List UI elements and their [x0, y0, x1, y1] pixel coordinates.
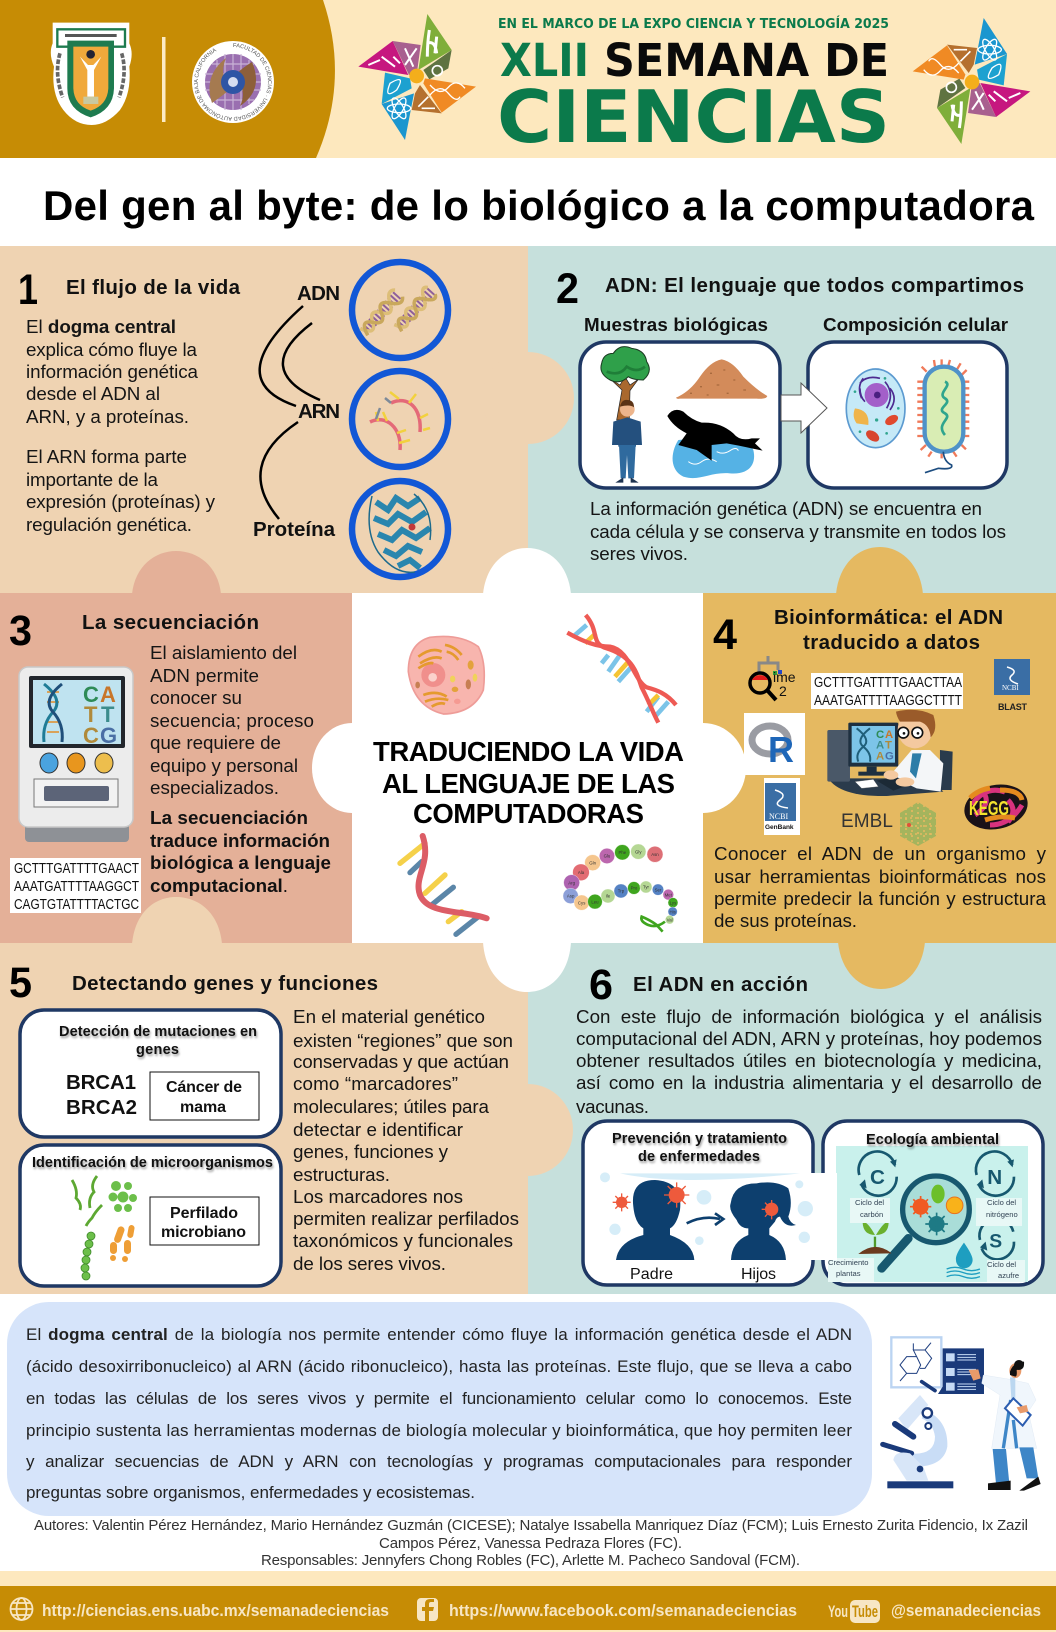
soil — [676, 359, 767, 399]
box: prevencion y tratamiento — [583, 1121, 837, 1285]
header eyebrow: EN EL MARCO DE LA EXPO CIENCIA Y TECNOLOGÍA 2025 — [498, 15, 889, 32]
box: ecologia ambiental: S — [989, 1231, 1002, 1252]
panel: resumen dogma central: preguntas sobre organismos, enfermedades y ecosistemas. — [26, 1483, 475, 1502]
icon: youtube — [828, 1600, 880, 1623]
label ADN: ADN — [297, 282, 340, 305]
icon: Qiime 2 — [750, 656, 796, 700]
icon: amino acid chain: Ser — [655, 887, 662, 892]
panel: resumen dogma central: (ácido desoxirribonucleico) al ARN (ácido ribonucleico), hasta las proteínas. Este flujo, que se lleva a cabo — [26, 1357, 852, 1376]
man — [620, 402, 635, 417]
text block 3: El aislamiento del — [150, 642, 297, 663]
arrow: samples to cells — [781, 383, 827, 433]
credits: Autores: Valentin Pérez Hernández, Mario Hernández Guzmán (CICESE); Natalye Issabella Manriquez Díaz (FCM); Luis Ernesto Zurita Fidencio, Ix Zazil — [34, 1517, 1028, 1534]
text block 3 — [150, 642, 331, 896]
number 3: 3 — [9, 607, 32, 655]
water — [673, 438, 754, 478]
box: prevencion y tratamiento: de enfermedades — [638, 1149, 760, 1165]
text block 2: La información genética (ADN) se encuentra en — [590, 498, 982, 519]
text block 1 — [26, 316, 216, 535]
panel: resumen dogma central: en todas las células de los seres vivos y permite el funcionamiento celular como lo conocemos. Este — [26, 1389, 852, 1408]
icon: sequencer machine: T — [101, 702, 115, 727]
icon: RNA bottom left — [400, 836, 487, 934]
logo divider — [162, 37, 166, 122]
icon: DNA top right — [567, 615, 676, 723]
panel: resumen dogma central: principio sustenta las herramientas modernas de biología molecular y bioinformática, que hoy permiten leer — [26, 1421, 852, 1440]
footer handle: @semanadeciencias — [891, 1601, 1041, 1620]
icon: sequencer machine: C — [83, 723, 99, 748]
text block 5: existen “regiones” que son — [293, 1030, 513, 1051]
icon: protein circle — [352, 481, 448, 577]
text block 3: computacional. — [150, 875, 288, 896]
text block 2 — [590, 498, 1006, 564]
text block 6: obtener resultados útiles en biotecnología y medicina, — [576, 1050, 1042, 1071]
icon: amino acid chain: Trp — [618, 889, 625, 894]
sequence box — [10, 858, 141, 913]
text block 1: importante de la — [26, 469, 159, 490]
icon: amino acid chain: Gln — [589, 860, 597, 865]
heading 5: Detectando genes y funciones — [72, 972, 378, 995]
number 6: 6 — [589, 961, 613, 1009]
text block 3: biológica a lenguaje — [150, 852, 331, 873]
icon: Qiime 2: 2 — [779, 683, 787, 699]
child silhouette — [730, 1182, 796, 1260]
icon: amino acid chain: Cys — [578, 900, 585, 905]
water drop — [956, 1243, 973, 1268]
bacterium — [917, 359, 969, 458]
icon: amino acid chain: Ile — [606, 894, 611, 899]
icon: scientist and microscope — [883, 1337, 1041, 1491]
microscope — [898, 1395, 928, 1430]
credits: Campos Pérez, Vanessa Pedraza Flores (FC). — [379, 1535, 682, 1552]
icon: DNA circle — [352, 262, 448, 358]
icon: youtube: Tube — [852, 1602, 878, 1621]
icon: NCBI GenBank: GenBank — [765, 824, 794, 831]
text block 1: regulación genética. — [26, 514, 192, 535]
text block 5: como “marcadores” — [293, 1073, 458, 1094]
text block 6: Con este flujo de información biológica y el análisis — [576, 1006, 1042, 1027]
box: deteccion de mutaciones: Cáncer de — [166, 1079, 242, 1096]
sequence box: GCTTTGATTTTGAACT — [14, 861, 139, 877]
box: identificacion de microorganismos: microbiano — [161, 1224, 246, 1241]
text block 4 — [714, 843, 1047, 931]
header banner — [0, 0, 1056, 158]
icon: sequencer machine: C — [83, 682, 99, 707]
arrows: flow curves — [260, 306, 320, 519]
sequence box — [811, 673, 963, 709]
text block 5: conservadas y que actúan — [293, 1051, 509, 1072]
tree — [611, 377, 638, 420]
text block 1: El dogma central — [26, 316, 176, 337]
logo: UABC shield — [51, 23, 132, 125]
text block 5: de los seres vivos. — [293, 1253, 446, 1274]
subheading muestras: Muestras biológicas — [584, 314, 768, 335]
father silhouette — [616, 1180, 694, 1260]
icon: amino acid chain: Arg — [568, 880, 576, 885]
text block 5: Los marcadores nos — [293, 1186, 463, 1207]
icon: amino acid chain: Ala — [578, 870, 585, 875]
header SEMANA DE: SEMANA DE — [604, 34, 889, 87]
text block 1: ARN, y a proteínas. — [26, 406, 189, 427]
text block 5: taxonómicos y funcionales — [293, 1230, 513, 1251]
cycle labels — [828, 1198, 1025, 1282]
text block 6: vacunas. — [576, 1096, 649, 1117]
title: Del gen al byte: de lo biológico a la computadora — [43, 182, 1035, 229]
heading 1: El flujo de la vida — [66, 276, 241, 299]
text block 1: información genética — [26, 361, 199, 382]
text block 5: genes, funciones y — [293, 1141, 449, 1162]
text block 1: desde el ADN al — [26, 383, 160, 404]
box: identificacion de microorganismos: Identificación de microorganismos — [32, 1155, 273, 1171]
label EMBL: EMBL — [841, 811, 893, 832]
panel: resumen dogma central — [7, 1302, 872, 1516]
icon: amino acid chain: Asn — [651, 852, 659, 857]
cycle labels: plantas — [836, 1269, 861, 1278]
box: deteccion de mutaciones: genes — [136, 1042, 179, 1058]
icon: EMBL hexagon dots — [900, 802, 936, 846]
icon: bioinformatician at computer: A — [876, 740, 884, 752]
cycle labels: Crecimiento — [828, 1258, 869, 1267]
credits — [34, 1517, 1028, 1569]
box: deteccion de mutaciones: BRCA1 — [66, 1071, 136, 1094]
heading 6: El ADN en acción — [633, 973, 808, 996]
text block 6: así como en la industria alimentaria y el desarrollo de — [576, 1072, 1042, 1093]
icon: NCBI BLAST: BLAST — [998, 702, 1028, 712]
icon: NCBI GenBank — [764, 778, 800, 835]
icon: KEGG: KEGG — [969, 798, 1009, 820]
box: identificacion de microorganismos: Perfilado — [170, 1205, 238, 1222]
scientist — [982, 1375, 1037, 1448]
number 5: 5 — [9, 959, 32, 1007]
cycle labels: nitrógeno — [986, 1210, 1018, 1219]
text block 3: especializados. — [150, 777, 279, 798]
icon: pinwheel right — [913, 18, 1030, 144]
icon: microbes — [72, 1176, 137, 1280]
heading 4: Bioinformática: el ADN — [774, 606, 1003, 629]
icon: sequencer machine — [19, 667, 133, 842]
panel 5: detectando genes — [9, 959, 519, 1286]
text block 1: explica cómo fluye la — [26, 339, 198, 360]
header CIENCIAS: CIENCIAS — [497, 75, 890, 159]
number 4: 4 — [713, 611, 737, 659]
panel: resumen dogma central: El dogma central de la biología nos permite entender cómo fluye la información genética desde el ADN — [26, 1325, 852, 1344]
cycle labels: Ciclo del — [855, 1198, 884, 1207]
box: deteccion de mutaciones: Detección de mutaciones en — [59, 1024, 257, 1040]
box: ecologia ambiental — [823, 1121, 1043, 1285]
icon: amino acid chain: Phe — [618, 850, 627, 855]
box: prevencion y tratamiento: Hijos — [741, 1266, 776, 1283]
panel 2: lenguaje compartido — [556, 265, 1024, 564]
logo: Facultad de Ciencias: FACULTAD DE CIENCIAS · UNIVERSIDAD AUTÓNOMA DE BAJA CALIFORNIA — [194, 43, 272, 121]
header XLII: XLII — [500, 34, 589, 87]
heading 2: ADN: El lenguaje que todos compartimos — [605, 274, 1024, 297]
center title: COMPUTADORAS — [413, 798, 644, 829]
text block 3: equipo y personal — [150, 755, 298, 776]
text block 3: secuencia; proceso — [150, 710, 314, 731]
text block 4: usar herramientas bioinformáticas nos — [714, 866, 1046, 887]
heading 3: La secuenciación — [82, 611, 259, 634]
icon: amino acid chain: Asp — [567, 894, 575, 899]
animal cell — [846, 369, 905, 448]
text block 3: La secuenciación — [150, 807, 308, 828]
text block 3: que requiere de — [150, 732, 281, 753]
icon: bioinformatician at computer: C — [876, 729, 884, 741]
panel 4: bioinformatica — [713, 606, 1047, 931]
icon: youtube: You — [828, 1602, 848, 1621]
text block 6 — [576, 1006, 1042, 1117]
seal — [667, 410, 763, 461]
box: composicion celular — [808, 342, 1007, 488]
plant — [871, 1237, 878, 1248]
icon: R logo — [744, 713, 805, 775]
box: prevencion y tratamiento: Padre — [630, 1266, 673, 1283]
text block 5 — [293, 1006, 519, 1274]
text block 4: permite predecir la función y estructura — [714, 888, 1047, 909]
box: ecologia ambiental: Ecología ambiental — [866, 1132, 999, 1148]
sequence box: AAATGATTTTAAGGCTTTT — [814, 693, 962, 709]
footer bar — [0, 1571, 1056, 1632]
icon: R logo: R — [768, 729, 794, 770]
sequence box: AAATGATTTTAAGGCT — [14, 879, 139, 895]
text block 5: estructuras. — [293, 1164, 390, 1185]
icon: cell — [408, 636, 484, 714]
box: deteccion de mutaciones — [20, 1010, 281, 1137]
icon: pinwheel left — [358, 14, 476, 140]
icon: globe — [10, 1598, 32, 1620]
center title: TRADUCIENDO LA VIDA — [373, 736, 684, 767]
box: deteccion de mutaciones: mama — [180, 1099, 226, 1116]
label ARN: ARN — [298, 400, 340, 423]
text block 6: computacional del ADN, ARN y proteínas, hoy podemos — [576, 1028, 1042, 1049]
heading 4: traducido a datos — [803, 631, 980, 654]
icon: bioinformatician at computer: G — [885, 750, 894, 762]
text block 3: conocer su — [150, 687, 242, 708]
icon: NCBI GenBank: NCBI — [769, 812, 788, 821]
text block 2: cada célula y se conserva y transmite en todos los — [590, 521, 1006, 542]
center title: AL LENGUAJE DE LAS — [382, 768, 675, 799]
icon: sequencer machine: T — [84, 702, 98, 727]
panel 1: flujo de la vida — [18, 262, 448, 577]
cycle labels: carbón — [860, 1210, 883, 1219]
icon: bioinformatician at computer: A — [885, 729, 893, 741]
icon: sequencer machine: G — [100, 723, 117, 748]
icon: KEGG — [960, 779, 1032, 835]
center title — [373, 736, 684, 829]
box: deteccion de mutaciones: BRCA2 — [66, 1096, 137, 1119]
number 2: 2 — [556, 265, 579, 313]
icon: amino acid chain: Lys — [670, 900, 676, 905]
panel: centro — [373, 615, 684, 934]
box: identificacion de microorganismos — [20, 1145, 281, 1286]
footer facebook: https://www.facebook.com/semanadeciencias — [449, 1601, 797, 1620]
credits: Responsables: Jennyfers Chong Robles (FC), Arlette M. Pacheco Sandoval (FCM). — [261, 1552, 800, 1569]
panel 3: secuenciacion — [9, 607, 331, 913]
box: ecologia ambiental: N — [987, 1166, 1002, 1189]
subheading composicion: Composición celular — [823, 314, 1009, 335]
sequence box: CAGTGTATTTTACTGC — [14, 897, 139, 913]
text block 2: seres vivos. — [590, 543, 688, 564]
label Proteína: Proteína — [253, 518, 336, 541]
icon: bioinformatician at computer: T — [885, 740, 892, 752]
text block 1: expresión (proteínas) y — [26, 491, 216, 512]
magnifier — [882, 1238, 908, 1268]
panel 6: ADN en accion — [576, 961, 1043, 1285]
box: prevencion y tratamiento: Prevención y tratamiento — [612, 1131, 787, 1147]
text block 4: de sus proteínas. — [714, 910, 857, 931]
text block 3: ADN permite — [150, 665, 259, 686]
text block 5: moleculares; útiles para — [293, 1096, 490, 1117]
icon: RNA circle — [352, 371, 448, 467]
panel backgrounds — [0, 246, 1056, 1294]
cycle labels: azufre — [998, 1271, 1019, 1280]
icon: NCBI BLAST — [994, 659, 1030, 712]
text block 5: En el material genético — [293, 1006, 485, 1027]
icon: amino acid chain: Met — [665, 892, 673, 897]
icon: amino acid chain: Pro — [631, 886, 638, 891]
icon: amino acid chain: Glu — [604, 854, 611, 859]
text block 3: traduce información — [150, 830, 330, 851]
icon: amino acid chain: Tyr — [643, 885, 650, 890]
box: ecologia ambiental: C — [870, 1166, 885, 1189]
text block 5: permiten realizar perfilados — [293, 1208, 519, 1229]
icon: NCBI BLAST: NCBI — [1002, 684, 1019, 692]
icon: amino acid chain: Gly — [635, 849, 642, 854]
text block 1: El ARN forma parte — [26, 446, 187, 467]
number 1: 1 — [18, 266, 38, 314]
cycle labels: Ciclo del — [987, 1260, 1016, 1269]
icon: Qiime 2: ime — [773, 669, 796, 685]
icon: amino acid chain: Val — [667, 917, 673, 922]
icon: amino acid chain: His — [670, 909, 676, 914]
text block 4: Conocer el ADN de un organismo y — [714, 843, 1047, 864]
box: muestras biologicas — [580, 342, 780, 488]
icon: sequencer machine: A — [100, 682, 116, 707]
icon: facebook — [417, 1598, 438, 1621]
cycle labels: Ciclo del — [987, 1198, 1016, 1207]
icon: amino acid chain: Leu — [591, 899, 599, 904]
panel: resumen dogma central: y analizar secuencias de ADN y ARN con tecnologías y programas computacionales para responder — [26, 1452, 852, 1471]
sequence box: GCTTTGATTTTGAACTTAA — [814, 675, 962, 691]
heading 4 — [774, 606, 1003, 654]
text block 5: detectar e identificar — [293, 1119, 463, 1140]
footer url: http://ciencias.ens.uabc.mx/semanadeciencias — [42, 1601, 389, 1620]
icon: amino acid chain — [563, 844, 678, 932]
icon: bioinformatician at computer: A — [876, 750, 884, 762]
icon: bioinformatician at computer — [827, 710, 953, 796]
